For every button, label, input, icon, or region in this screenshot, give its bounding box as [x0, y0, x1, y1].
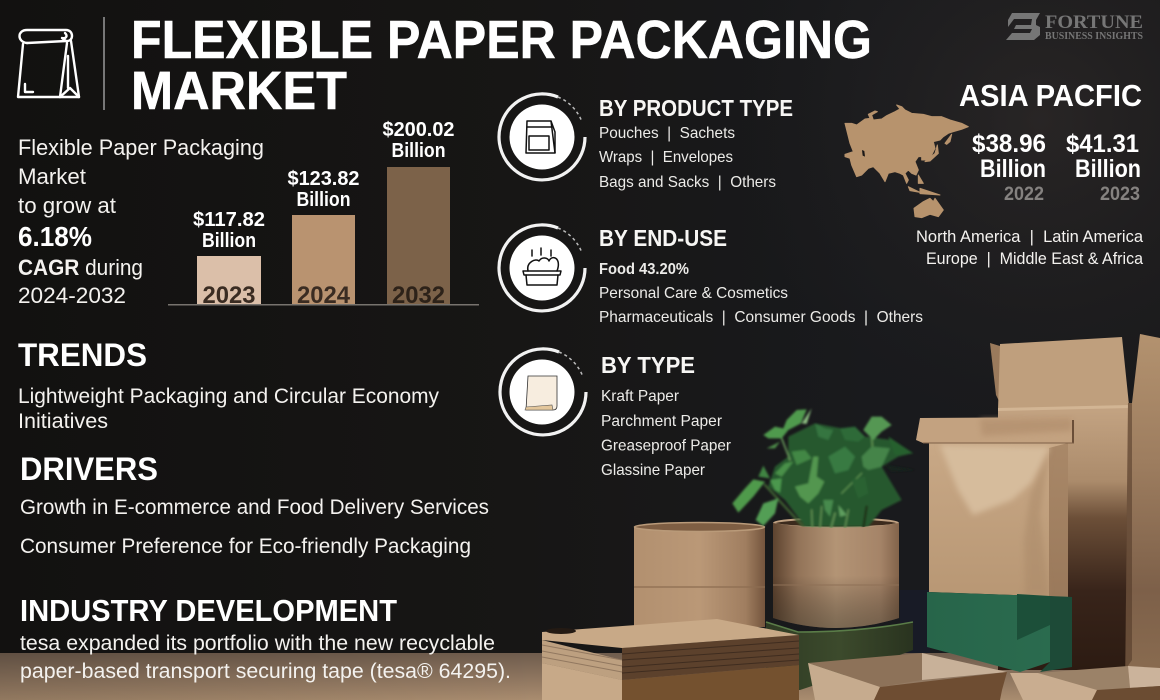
text block: by product type: Pouches | Sachets [599, 125, 735, 142]
logo: Fortune Business Insights [1006, 12, 1143, 42]
bar 2023 [193, 209, 265, 309]
text block: by end-use: BY END-USE [599, 225, 727, 251]
drivers section: Growth in E-commerce and Food Delivery Services [20, 496, 489, 519]
bar 2032: Billion [392, 140, 446, 162]
text block: by type: Parchment Paper [601, 413, 723, 430]
photo: kraft paper packaging products [0, 334, 1160, 700]
icon: paper bag [18, 30, 79, 97]
text block: by type: Greaseproof Paper [601, 438, 732, 454]
industry development section: INDUSTRY DEVELOPMENT [20, 593, 397, 628]
trends section: Lightweight Packaging and Circular Economy [18, 385, 439, 408]
bar 2024: Billion [296, 189, 350, 211]
map: Asia Pacific [845, 105, 968, 218]
industry development section [20, 593, 511, 683]
bar 2032: 2032 [392, 282, 445, 309]
text block: by type: Kraft Paper [601, 388, 680, 405]
text block: CAGR summary [18, 135, 264, 308]
bar 2023: Billion [202, 230, 256, 252]
bar 2023: 2023 [202, 282, 256, 309]
trends section: Initiatives [18, 410, 108, 433]
stat: 2023 value: $41.31 [1066, 130, 1139, 158]
text block: CAGR summary: to grow at [18, 193, 116, 218]
bar 2032: $200.02 [382, 119, 454, 141]
text block: CAGR summary: 2024-2032 [18, 283, 126, 308]
bar chart: market size [168, 119, 479, 309]
plant [732, 408, 915, 528]
text block: by end-use [599, 225, 923, 326]
dark foliage mass [768, 423, 912, 527]
text block: by end-use: Food 43.20% [599, 261, 689, 278]
text block: by product type: BY PRODUCT TYPE [599, 95, 793, 121]
green base [766, 622, 913, 690]
bar 2024: $123.82 [288, 168, 360, 190]
bar 2023: $117.82 [193, 209, 265, 231]
divider [103, 17, 105, 110]
text block: by end-use: Personal Care & Cosmetics [599, 285, 788, 302]
table surface [0, 653, 1160, 700]
text block: CAGR summary: Market [18, 164, 86, 189]
text block: CAGR summary: CAGR during [18, 255, 143, 280]
trends section [18, 337, 439, 433]
title: FLEXIBLE PAPER PACKAGING [131, 10, 872, 70]
industry development section: tesa expanded its portfolio with the new recyclable [20, 632, 495, 655]
icon: end-use food bowl badge [499, 225, 585, 311]
stat: 2022 value [972, 130, 1046, 205]
paper stack [542, 619, 799, 700]
stat: 2022 value: Billion [980, 155, 1046, 183]
drivers section [20, 451, 489, 558]
stat: 2022 value: 2022 [1004, 184, 1044, 205]
icon: parchment paper badge [500, 349, 586, 435]
text block: other regions: North America | Latin America [916, 227, 1144, 246]
text block: other regions [916, 227, 1144, 268]
text block: CAGR summary: Flexible Paper Packaging [18, 135, 264, 160]
text block: by type: BY TYPE [601, 352, 695, 378]
leaves [732, 408, 915, 526]
cylinder left [634, 522, 765, 627]
stat: 2023 value: Billion [1075, 155, 1141, 183]
stat: 2023 value: 2023 [1100, 184, 1140, 205]
trends section: TRENDS [18, 337, 147, 373]
logo wordmark [1045, 12, 1143, 42]
text block: CAGR summary: 6.18% [18, 221, 92, 252]
text block: by end-use: Pharmaceuticals | Consumer Goods | Others [599, 309, 923, 326]
heading: Asia Pacific: ASIA PACFIC [959, 78, 1142, 113]
title [131, 10, 872, 121]
industry development section: paper-based transport securing tape (tesa® 64295). [20, 660, 511, 683]
title: MARKET [131, 61, 347, 121]
bar 2032 [382, 119, 454, 309]
text block: by product type: Bags and Sacks | Others [599, 174, 776, 191]
text block: by type [601, 352, 732, 479]
stat: 2022 value: $38.96 [972, 130, 1046, 158]
stat: 2023 value [1066, 130, 1141, 205]
right carton [1125, 334, 1160, 700]
drivers section: Consumer Preference for Eco-friendly Packaging [20, 535, 471, 558]
bar 2024: 2024 [297, 282, 351, 309]
open box right [1010, 666, 1160, 700]
planter rim [774, 518, 898, 528]
paper bag [916, 417, 1074, 672]
text block: by type: Glassine Paper [601, 462, 706, 479]
stems [765, 437, 873, 528]
icon: product type pouch badge [499, 94, 585, 180]
bar 2024 [288, 168, 360, 309]
text block: other regions: Europe | Middle East & Africa [926, 249, 1144, 268]
icon: FB mark [1006, 13, 1040, 40]
drivers section: DRIVERS [20, 451, 158, 487]
text block: by product type [599, 95, 793, 191]
planter body and base [766, 523, 913, 690]
logo wordmark: FORTUNE [1045, 12, 1143, 33]
logo wordmark: BUSINESS INSIGHTS [1045, 31, 1143, 42]
tall carton [990, 337, 1129, 670]
open box front [808, 653, 1007, 700]
text block: by product type: Wraps | Envelopes [599, 149, 733, 166]
